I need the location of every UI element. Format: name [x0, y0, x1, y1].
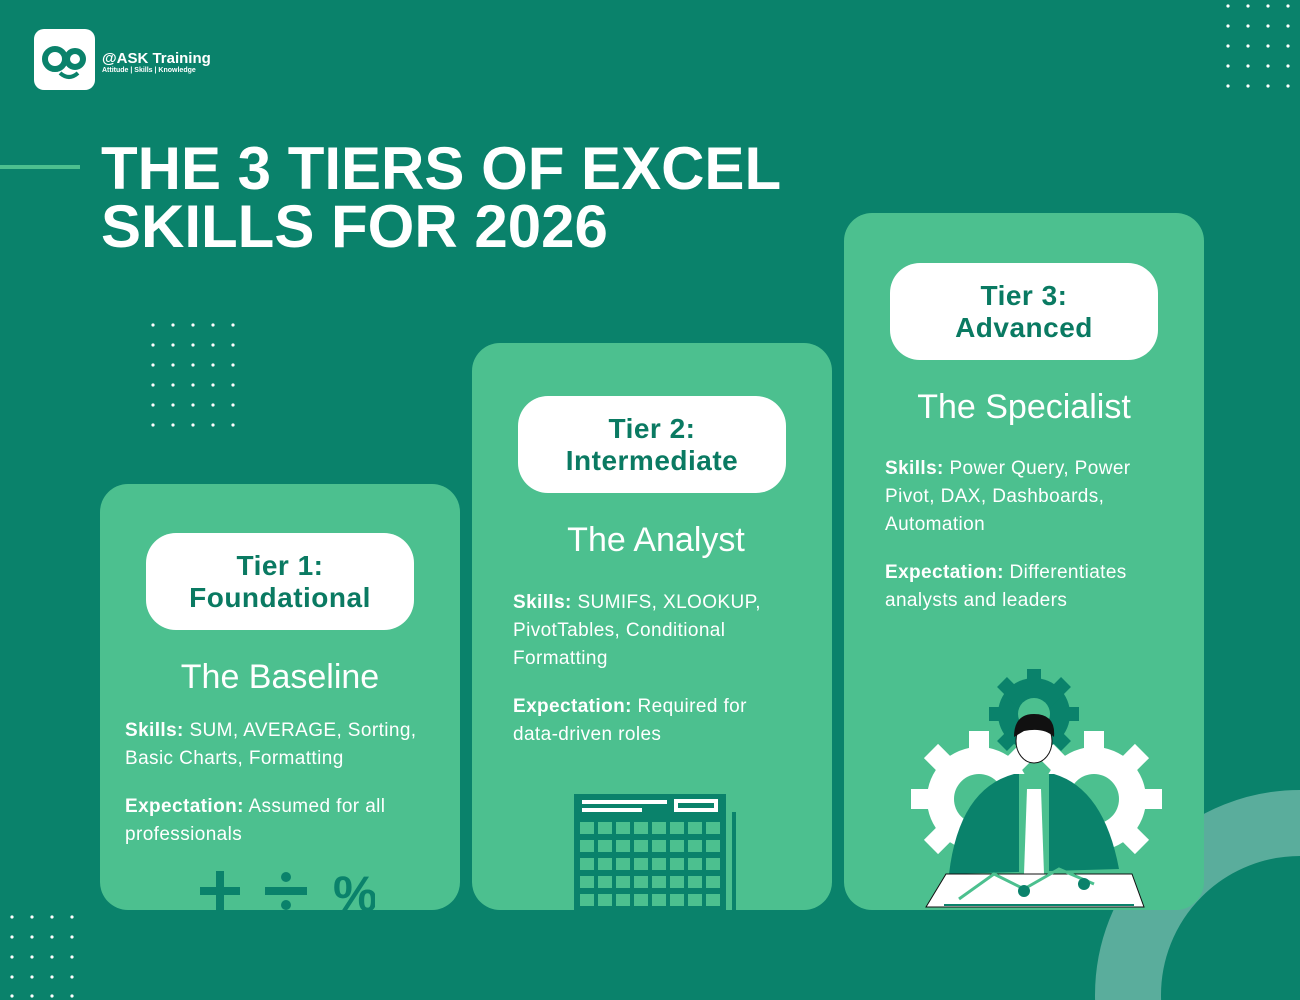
title — [101, 135, 781, 260]
tier 1 body: Expectation: Assumed for all professionals — [125, 796, 385, 845]
logo — [34, 29, 211, 90]
tier 2 pill — [518, 396, 786, 493]
logo text: @ASK Training — [102, 50, 211, 67]
tier 3 body: Expectation: Differentiates analysts and leaders — [885, 562, 1127, 611]
tier 1 body — [125, 720, 416, 845]
decorative line — [0, 165, 80, 169]
tier 2 body: Skills: SUMIFS, XLOOKUP, PivotTables, Conditional Formatting — [513, 592, 761, 669]
icon: spreadsheet — [574, 794, 736, 910]
title: SKILLS FOR 2026 — [101, 193, 608, 260]
tier 3 subtitle: The Specialist — [917, 388, 1131, 426]
tier 2 pill: Tier 2: — [608, 412, 696, 444]
tier 2 pill: Intermediate — [566, 444, 738, 476]
icon: math symbols — [200, 869, 375, 910]
tier 1 pill: Tier 1: — [236, 550, 324, 580]
tier 1 pill: Foundational — [189, 582, 371, 612]
panel: tier 1 — [100, 484, 460, 910]
tier 3 body — [885, 458, 1131, 611]
tier 1 pill — [146, 533, 414, 630]
panel: tier 3 — [844, 213, 1204, 910]
tier 1 body: Skills: SUM, AVERAGE, Sorting, Basic Charts, Formatting — [125, 720, 416, 769]
tier 2 subtitle: The Analyst — [567, 521, 745, 559]
tier 3 pill: Advanced — [955, 312, 1093, 342]
tier 3 pill: Tier 3: — [980, 280, 1068, 310]
tier 1 subtitle: The Baseline — [181, 658, 379, 696]
tier 2 body — [513, 592, 761, 745]
icon: logo mark — [34, 29, 95, 90]
tier 3 pill — [890, 263, 1158, 360]
panel: tier 2 — [472, 343, 832, 910]
tier 3 body: Skills: Power Query, Power Pivot, DAX, Dashboards, Automation — [885, 458, 1131, 535]
tier 2 body: Expectation: Required for data-driven roles — [513, 696, 747, 745]
logo: Attitude | Skills | Knowledge — [102, 67, 196, 74]
title: THE 3 TIERS OF EXCEL — [101, 135, 781, 202]
illustration: man with gears — [911, 669, 1162, 908]
